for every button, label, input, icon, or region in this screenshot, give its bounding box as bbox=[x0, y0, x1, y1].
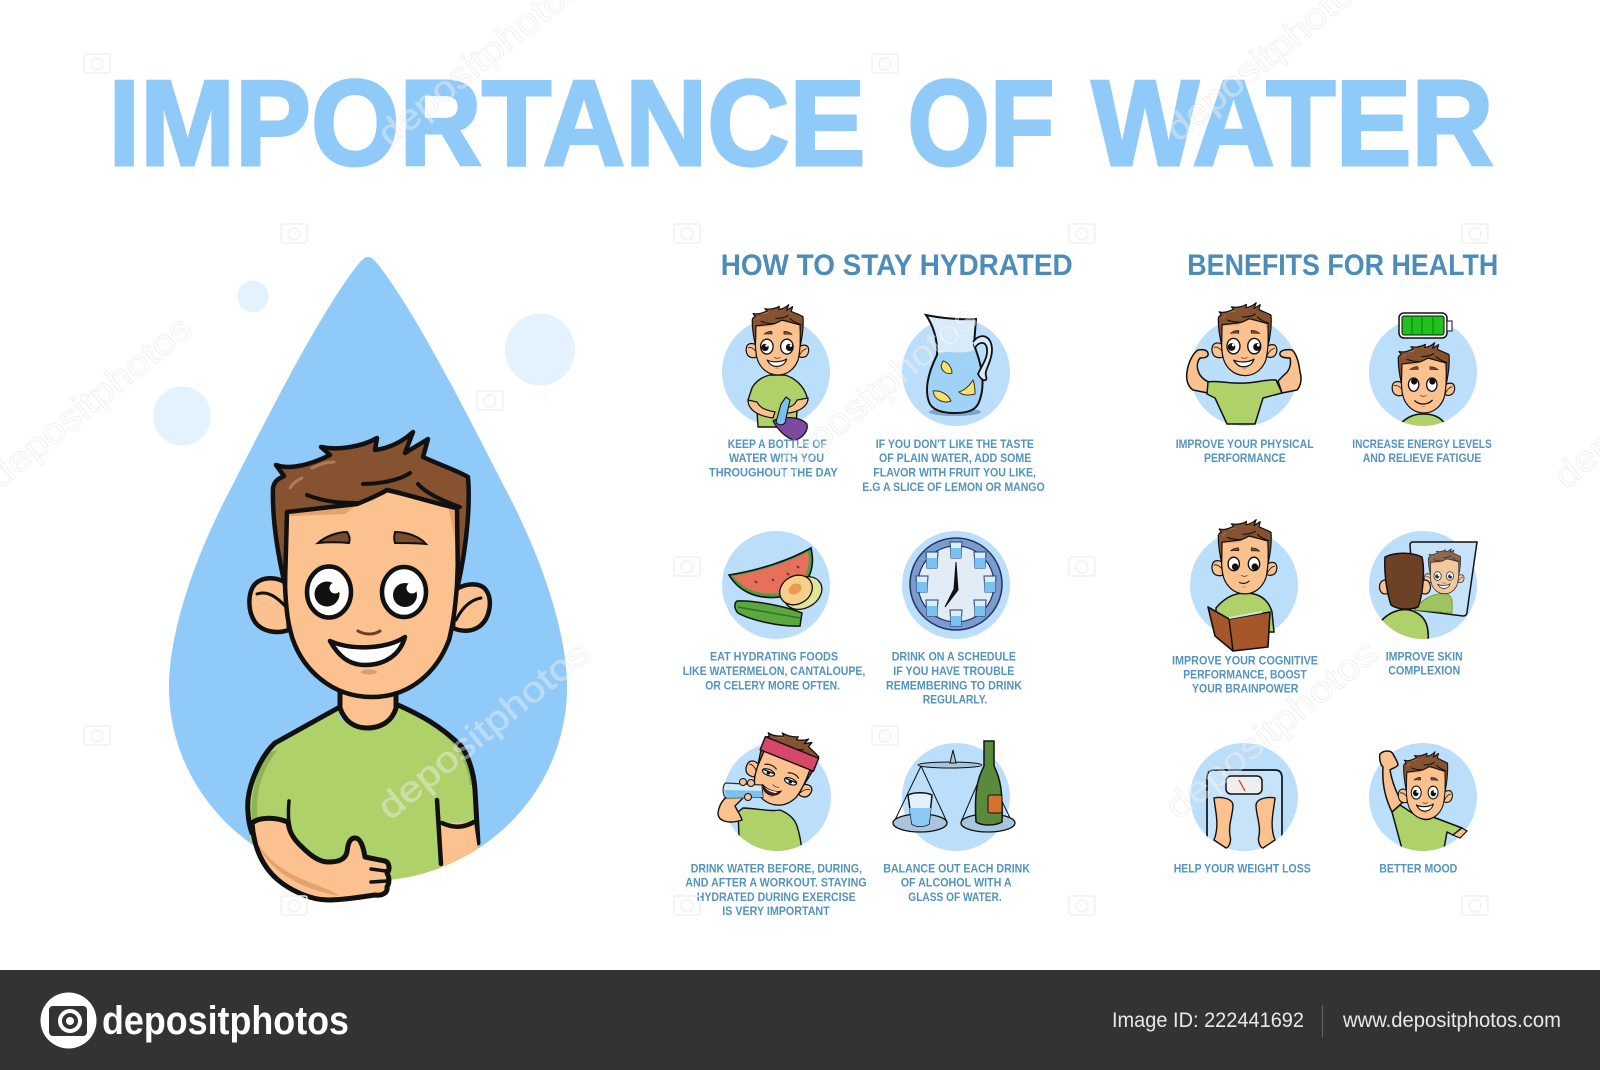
panel: cognitive performance bbox=[1172, 520, 1318, 696]
title bbox=[108, 55, 1494, 191]
icon: boy waving bbox=[1369, 743, 1477, 860]
title: IMPORTANCE bbox=[108, 55, 866, 191]
boy shirt bbox=[248, 705, 480, 900]
text: cognitive performance: IMPROVE YOUR COGNITIVE bbox=[1172, 654, 1318, 667]
website url: www.depositphotos.com bbox=[1342, 1009, 1561, 1032]
text: drink on a schedule: DRINK ON A SCHEDULE bbox=[892, 651, 1016, 664]
text: add fruit: E.G A SLICE OF LEMON OR MANGO bbox=[862, 481, 1045, 494]
text: add fruit: IF YOU DON'T LIKE THE TASTE bbox=[876, 438, 1034, 451]
text: physical performance: PERFORMANCE bbox=[1204, 452, 1286, 465]
panel: drink during workout bbox=[685, 721, 867, 918]
icon: balance scale with glass and bottle bbox=[893, 741, 1015, 851]
water drop bbox=[169, 257, 567, 881]
panel: hydrating foods bbox=[683, 531, 865, 692]
icon: watermelon, cantaloupe, celery bbox=[722, 531, 830, 639]
text: physical performance: IMPROVE YOUR PHYSICAL bbox=[1176, 438, 1314, 451]
text: drink during workout: AND AFTER A WORKOUT. STAYING bbox=[685, 877, 867, 890]
illustration: boy in water drop bbox=[153, 257, 575, 900]
panel: physical performance bbox=[1176, 303, 1314, 465]
text: drink on a schedule: REGULARLY. bbox=[923, 693, 987, 706]
text: keep a bottle: KEEP A BOTTLE OF bbox=[728, 438, 827, 451]
heading: benefits for health: BENEFITS FOR HEALTH bbox=[1187, 249, 1498, 282]
text: energy levels: AND RELIEVE FATIGUE bbox=[1363, 452, 1482, 465]
icon: boy drinking with headband bbox=[717, 732, 831, 851]
watermark overlay: depositphotos bbox=[1157, 632, 1385, 827]
text: cognitive performance: PERFORMANCE, BOOST bbox=[1183, 668, 1307, 681]
text: drink during workout: DRINK WATER BEFORE, DURING, bbox=[691, 863, 862, 876]
panel: add fruit bbox=[862, 315, 1045, 494]
text: add fruit: OF PLAIN WATER, ADD SOME bbox=[879, 452, 1032, 465]
text: drink during workout: HYDRATED DURING EXERCISE bbox=[697, 891, 856, 904]
text: balance alcohol: GLASS OF WATER. bbox=[908, 891, 1002, 904]
text: balance alcohol: OF ALCOHOL WITH A bbox=[901, 877, 1012, 890]
text: drink during workout: IS VERY IMPORTANT bbox=[722, 905, 830, 918]
icon: water jug with lemon bbox=[902, 315, 1010, 426]
text: cognitive performance bbox=[1172, 654, 1318, 696]
text: balance alcohol bbox=[883, 863, 1031, 904]
panel: weight loss bbox=[1174, 743, 1311, 876]
panel: keep a bottle bbox=[709, 305, 838, 480]
text: drink on a schedule: IF YOU HAVE TROUBLE bbox=[893, 665, 1015, 678]
boy left arm and thumb bbox=[252, 801, 389, 900]
bubble small bbox=[238, 280, 268, 312]
text: keep a bottle: WATER WITH YOU bbox=[729, 452, 824, 465]
text: skin complexion: COMPLEXION bbox=[1388, 664, 1460, 677]
text: add fruit bbox=[862, 438, 1045, 494]
panel: drink on a schedule bbox=[886, 531, 1023, 706]
text: better mood: BETTER MOOD bbox=[1379, 863, 1457, 876]
text: skin complexion bbox=[1386, 650, 1463, 677]
boy neck bbox=[340, 690, 396, 728]
title: OF bbox=[908, 55, 1054, 191]
boy head bbox=[249, 432, 490, 697]
icon: boy reading book bbox=[1190, 520, 1298, 651]
text: energy levels: INCREASE ENERGY LEVELS bbox=[1352, 438, 1492, 451]
image id: Image ID: 222441692 bbox=[1112, 1009, 1304, 1032]
bubble large bbox=[505, 314, 575, 386]
icon: boy with bottle bbox=[722, 305, 830, 440]
panel: balance alcohol bbox=[883, 741, 1031, 904]
text: energy levels bbox=[1352, 438, 1492, 465]
heading: how to stay hydrated: HOW TO STAY HYDRATED bbox=[721, 249, 1073, 282]
text: keep a bottle bbox=[709, 438, 838, 480]
text: hydrating foods bbox=[683, 651, 865, 692]
icon: depositphotos camera logo bbox=[40, 992, 96, 1048]
text: add fruit: FLAVOR WITH FRUIT YOU LIKE, bbox=[873, 467, 1036, 480]
text: drink on a schedule bbox=[886, 651, 1023, 706]
footer bar bbox=[0, 970, 1600, 1070]
text: weight loss: HELP YOUR WEIGHT LOSS bbox=[1174, 863, 1311, 876]
text: hydrating foods: LIKE WATERMELON, CANTALOUPE, bbox=[683, 665, 865, 678]
boy right arm bbox=[437, 800, 478, 870]
text: balance alcohol: BALANCE OUT EACH DRINK bbox=[883, 863, 1031, 876]
text: keep a bottle: THROUGHOUT THE DAY bbox=[709, 467, 838, 480]
text: drink during workout bbox=[685, 863, 867, 918]
icon: boy with full battery bbox=[1369, 313, 1477, 430]
text: hydrating foods: EAT HYDRATING FOODS bbox=[710, 651, 838, 664]
icon: feet on weighing scale bbox=[1190, 743, 1298, 851]
panel: better mood bbox=[1369, 743, 1477, 876]
icon: boy looking in mirror bbox=[1369, 531, 1477, 645]
text: skin complexion: IMPROVE SKIN bbox=[1386, 650, 1463, 663]
watermark overlay: depositphotos bbox=[369, 632, 597, 827]
icon: clock of water glasses bbox=[902, 531, 1010, 639]
footer logotype: depositphotos bbox=[102, 999, 349, 1043]
title: WATER bbox=[1092, 55, 1494, 191]
text: hydrating foods: OR CELERY MORE OFTEN. bbox=[705, 679, 840, 692]
bubble medium bbox=[153, 386, 211, 446]
text: drink on a schedule: REMEMBERING TO DRINK bbox=[886, 679, 1023, 692]
text: cognitive performance: YOUR BRAINPOWER bbox=[1192, 683, 1299, 696]
panel: energy levels bbox=[1352, 313, 1492, 465]
watermark overlay: depositphotos bbox=[764, 297, 984, 486]
icon: boy flexing muscles bbox=[1187, 303, 1301, 426]
text: physical performance bbox=[1176, 438, 1314, 465]
panel: skin complexion bbox=[1369, 531, 1477, 677]
